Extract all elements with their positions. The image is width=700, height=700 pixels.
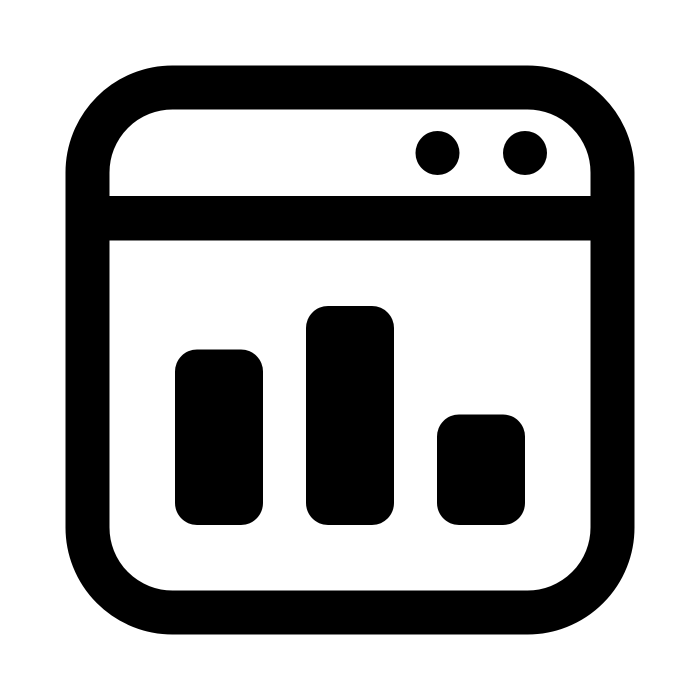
bar chart [175, 306, 525, 525]
window button: right dot [503, 131, 547, 175]
bar: left [175, 350, 263, 525]
title bar divider [88, 196, 612, 240]
bar: right [437, 414, 525, 525]
window frame [88, 88, 612, 612]
window button: left dot [416, 131, 460, 175]
bar: middle [306, 306, 394, 525]
